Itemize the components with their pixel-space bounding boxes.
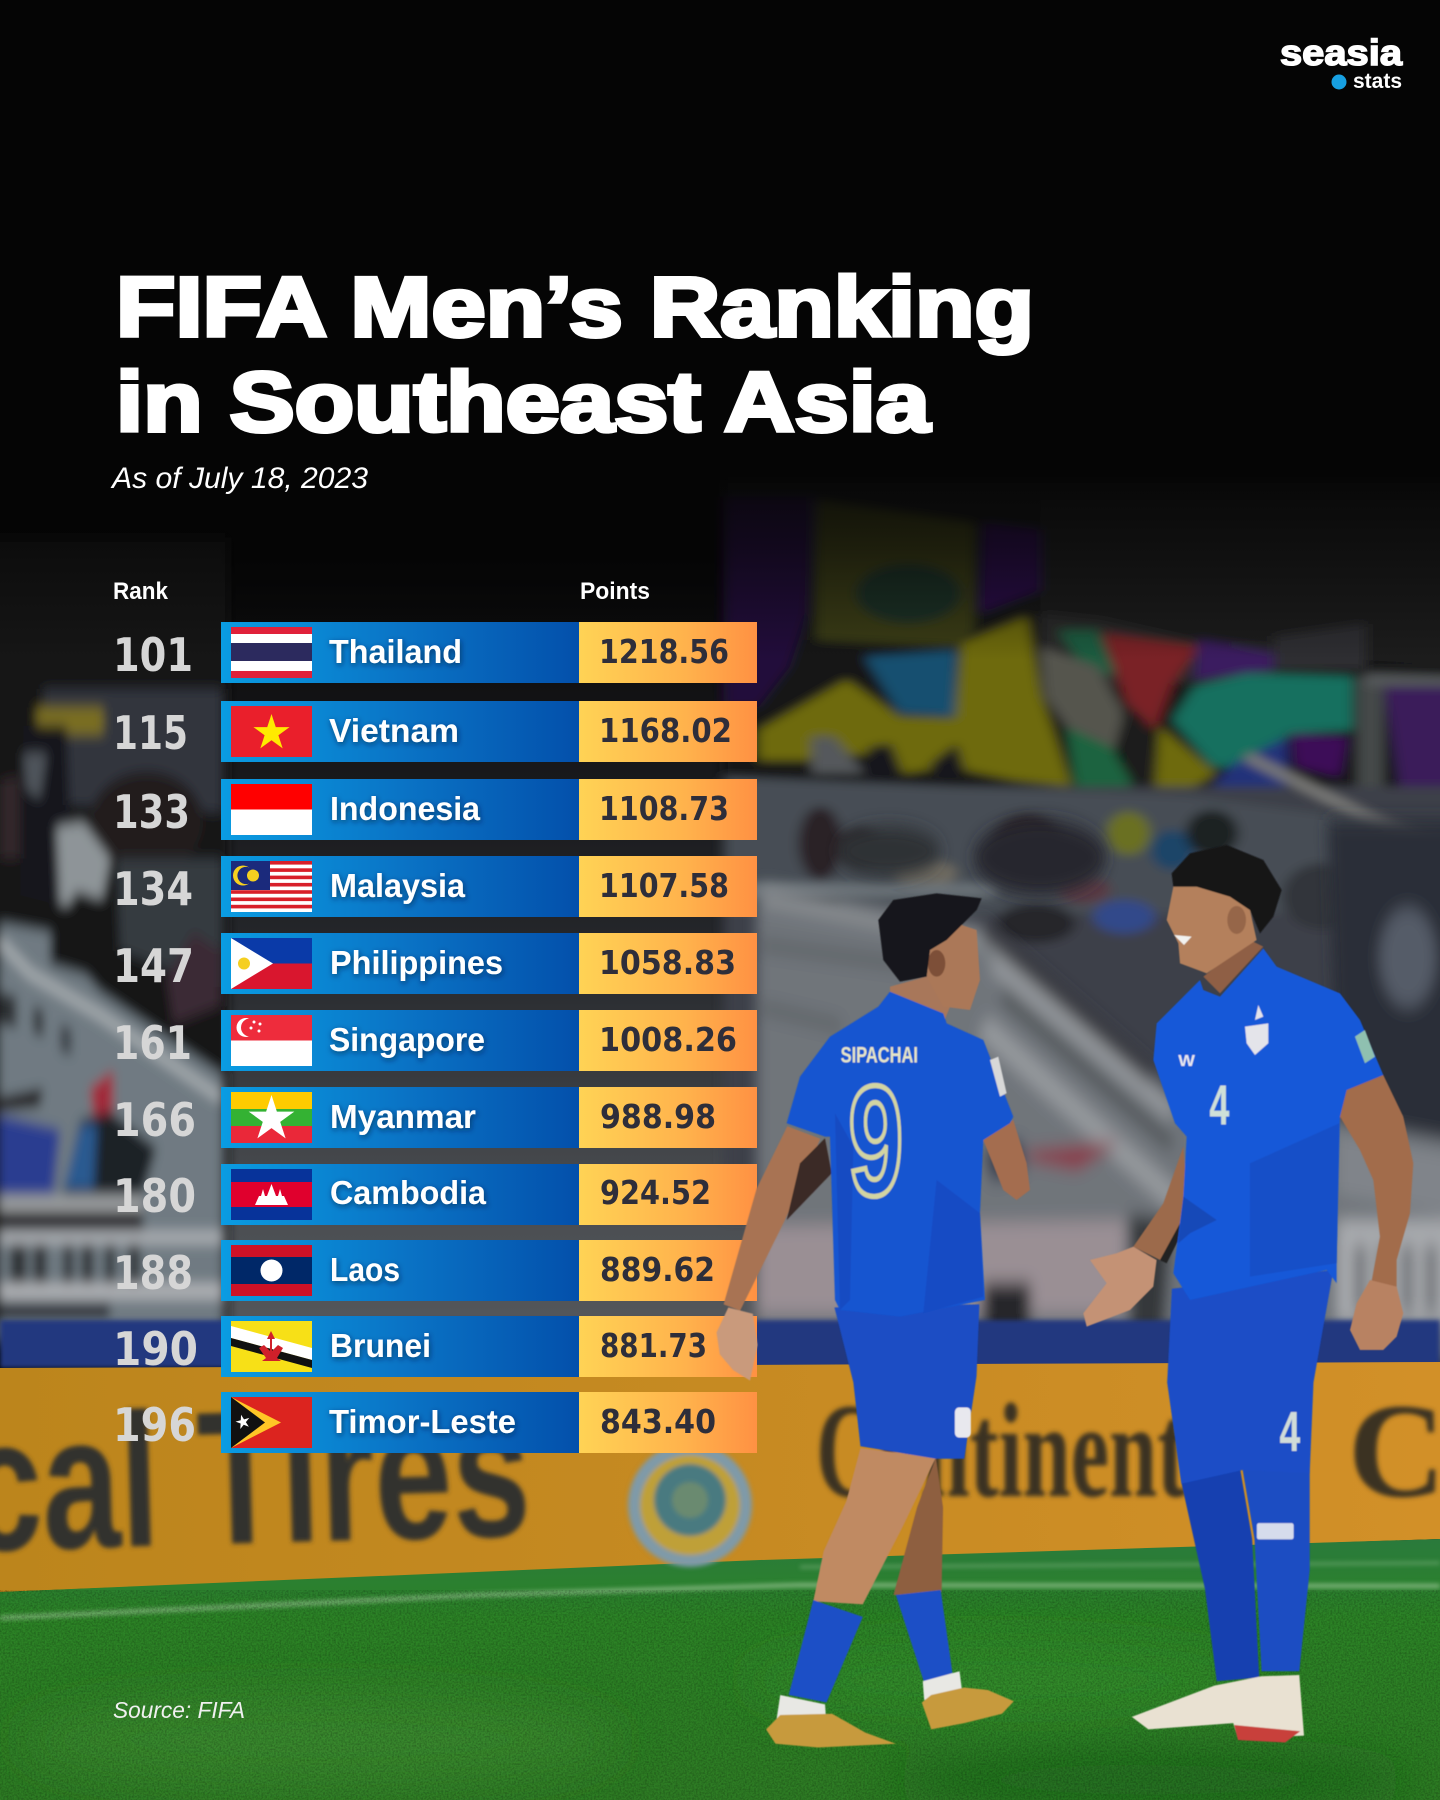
- row: Brunei: [113, 1316, 757, 1377]
- subtitle: As of July 18, 2023: [110, 462, 368, 495]
- row: Myanmar: 988.98: [600, 1097, 716, 1136]
- shirt number 9: 9: [848, 1054, 903, 1229]
- row: Philippines: Philippines: [330, 944, 503, 981]
- row: Myanmar: 166: [113, 1093, 196, 1147]
- row: Indonesia: [113, 779, 757, 840]
- row: Malaysia: 134: [113, 862, 193, 916]
- shirt number 4: 4: [1209, 1075, 1230, 1138]
- row: Indonesia: 1108.73: [599, 789, 729, 828]
- shirt crest: [1245, 1005, 1268, 1055]
- row: Cambodia: [113, 1164, 757, 1225]
- logo: seasia stats: [1280, 32, 1403, 93]
- grass texture: [0, 1590, 1440, 1800]
- left stand and spectators: [0, 537, 228, 1345]
- shirt name: SIPACHAI: [841, 1043, 918, 1068]
- shirt logo: W: [1178, 1053, 1196, 1070]
- row: Singapore: [113, 1010, 757, 1071]
- row: Indonesia: 133: [113, 785, 190, 839]
- row: Malaysia: Malaysia: [330, 867, 466, 904]
- board roundel logo: [628, 1443, 752, 1567]
- row: Vietnam: [113, 701, 757, 762]
- row: Cambodia: 180: [113, 1169, 196, 1223]
- players: [717, 845, 1413, 1748]
- upper right banners and crowd: [724, 480, 1440, 1220]
- row: Laos: 188: [113, 1246, 193, 1300]
- row: Brunei: 881.73: [600, 1326, 707, 1365]
- row: Philippines: [113, 933, 757, 994]
- row: Vietnam: 1168.02: [599, 711, 732, 750]
- row: Timor-Leste: Timor-Leste: [329, 1403, 516, 1440]
- row: Thailand: 1218.56: [599, 632, 729, 671]
- player 9 upper body: [787, 893, 1030, 1317]
- grass mottling: [20, 1640, 1410, 1800]
- row: Timor-Leste: 843.40: [600, 1402, 716, 1441]
- icon: blue circle: [1332, 74, 1346, 90]
- pitch lines: [0, 1563, 1440, 1618]
- row: Malaysia: [113, 856, 757, 917]
- row: Malaysia: 1107.58: [599, 866, 729, 905]
- table headers: Points: [580, 578, 650, 605]
- row: Laos: [113, 1240, 757, 1301]
- row: Myanmar: [113, 1087, 757, 1148]
- source: Source: FIFA: [113, 1697, 245, 1723]
- logo: seasia stats: seasia: [1280, 32, 1403, 73]
- top darkening overlay: [0, 440, 1440, 660]
- row: Vietnam: Vietnam: [329, 712, 459, 749]
- row: Thailand: 101: [113, 628, 193, 682]
- row: Indonesia: Indonesia: [330, 790, 481, 827]
- lower right stand: [757, 820, 1440, 1364]
- row: Cambodia: 924.52: [600, 1173, 711, 1212]
- row: Brunei: Brunei: [330, 1327, 431, 1364]
- orange advertising board: [0, 1362, 1440, 1592]
- shorts number 4: 4: [1279, 1400, 1300, 1464]
- row: Laos: 889.62: [600, 1250, 715, 1289]
- row: Timor-Leste: 196: [113, 1398, 196, 1452]
- row: Singapore: Singapore: [329, 1021, 485, 1058]
- player 9 lower body: [717, 1126, 1014, 1748]
- title: [116, 260, 1034, 449]
- ranking table: [113, 622, 757, 1453]
- title: FIFA Men’s Ranking: [116, 260, 1034, 354]
- table headers: Rank: [113, 578, 169, 605]
- row: Singapore: 1008.26: [599, 1020, 737, 1059]
- gaps between table rows: [190, 560, 790, 1340]
- logo: seasia stats: stats: [1353, 70, 1402, 93]
- blue advertising band: [0, 1320, 1440, 1368]
- board lettering: Continental: Continent: [816, 1377, 1186, 1526]
- row: Timor-Leste: [113, 1392, 757, 1453]
- row: Laos: Laos: [330, 1251, 400, 1288]
- pitch: [0, 1539, 1440, 1800]
- player 4 upper body: [1083, 845, 1413, 1350]
- table headers: [113, 578, 650, 605]
- row: Philippines: 1058.83: [599, 943, 736, 982]
- player 4 lower body: [1132, 1270, 1333, 1742]
- row: Thailand: [113, 622, 757, 683]
- row: Philippines: 147: [113, 939, 194, 993]
- row: Singapore: 161: [113, 1016, 192, 1070]
- sleeve patch: [990, 1057, 1007, 1097]
- row: Thailand: Thailand: [329, 633, 462, 670]
- row: Cambodia: Cambodia: [330, 1174, 487, 1211]
- row: Myanmar: Myanmar: [330, 1098, 476, 1135]
- shorts crest: [955, 1408, 971, 1438]
- title: in Southeast Asia: [116, 355, 931, 449]
- row: Brunei: 190: [113, 1322, 198, 1376]
- sleeve badge: [1355, 1030, 1375, 1063]
- sock logos: [1257, 1523, 1294, 1539]
- row: Vietnam: 115: [113, 706, 188, 760]
